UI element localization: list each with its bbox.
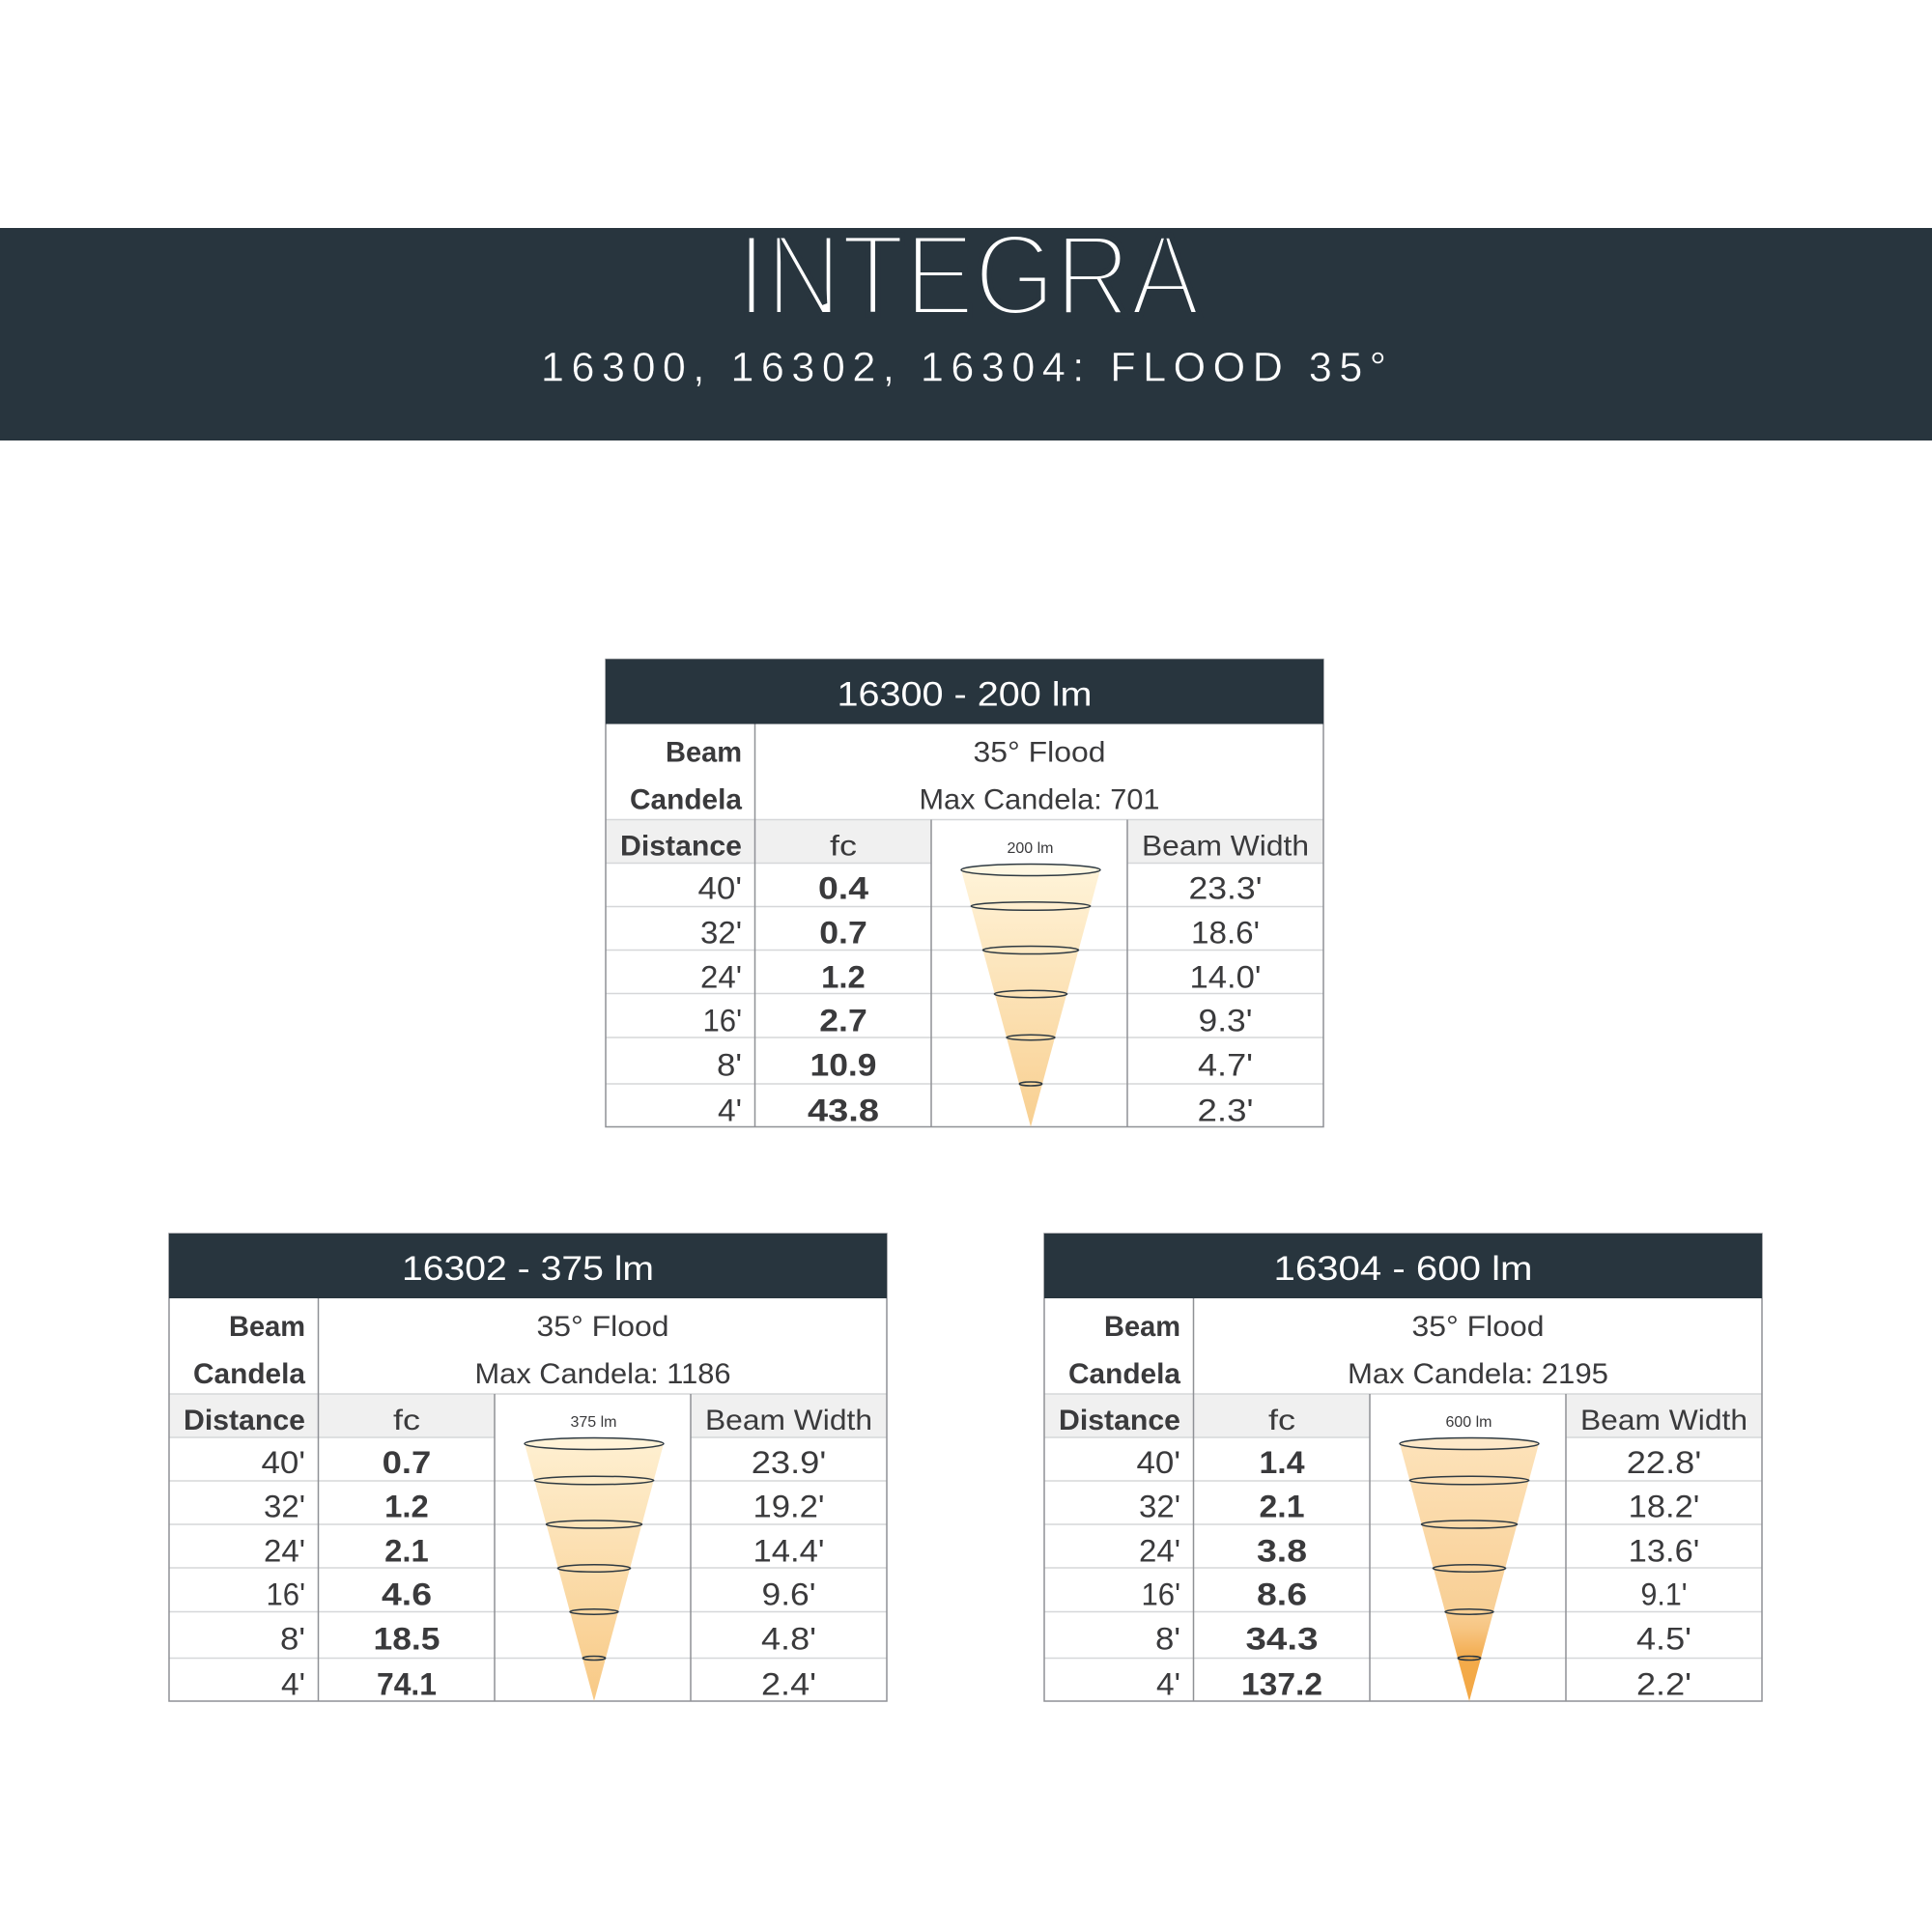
fc column: 18.5 [373,1621,440,1656]
beam row [666,736,1105,769]
fc column [1241,1445,1322,1702]
beam width column [1627,1445,1701,1702]
title: INTEGRA: INTEGRA [737,211,1200,340]
fc column: 1.2 [384,1490,429,1524]
icon: light cone 375 lm [525,1414,664,1701]
column headings: Distance [620,831,742,862]
header text: 16300 - 200 lm [837,676,1092,713]
beam row: Beam [1104,1311,1180,1343]
column headings [184,1405,872,1436]
distance column [697,871,742,1128]
beam width column: 14.4' [753,1534,825,1569]
distance column: 8' [1155,1621,1180,1656]
subtitle: 16300, 16302, 16304: FLOOD 35° [541,344,1386,390]
fc column: 0.7 [819,916,867,951]
distance column: 24' [700,960,742,995]
beam width column: 13.6' [1629,1534,1699,1569]
beam width column: 23.3' [1188,871,1262,906]
distance column [1136,1445,1180,1702]
table: 16302 - 375 lm [169,1234,887,1702]
column headings: Beam Width [1580,1405,1747,1436]
fc column [373,1445,440,1702]
column headings [620,831,1309,862]
fc column: 2.7 [819,1003,867,1037]
column headings: Distance [1059,1405,1180,1436]
beam width column: 9.3' [1198,1003,1252,1037]
header text: 16302 - 375 lm [402,1250,654,1288]
column headings [1059,1405,1747,1436]
distance column [261,1445,305,1702]
beam width column: 9.1' [1640,1577,1687,1611]
beam row: 35° Flood [974,736,1105,769]
fc column: 137.2 [1241,1667,1322,1702]
table shading and grid [1044,1234,1762,1701]
header bar [606,659,1323,724]
table: 16300 - 200 lm [606,659,1323,1128]
table: 16304 - 600 lm [1044,1234,1762,1702]
beam width column: 4.7' [1198,1047,1253,1082]
distance column: 32' [700,916,742,951]
candela row: Max Candela: 1186 [475,1358,730,1390]
distance column: 40' [697,871,742,906]
fc column: 74.1 [377,1667,437,1702]
beam width column [1188,871,1262,1128]
beam row: Beam [666,736,742,769]
distance column: 16' [703,1003,742,1037]
header text: 16304 - 600 lm [1273,1250,1532,1288]
candela row: Max Candela: 701 [920,784,1159,815]
fc column: 2.1 [384,1534,429,1569]
beam width column: 9.6' [761,1577,815,1611]
distance column: 16' [1142,1577,1180,1611]
beam row [229,1311,668,1343]
fc column: 43.8 [808,1094,879,1128]
fc column: 4.6 [382,1577,432,1611]
fc column: 8.6 [1257,1577,1307,1611]
fc column: 3.8 [1257,1534,1307,1569]
candela row [193,1358,730,1390]
beam width column: 2.2' [1636,1667,1691,1702]
candela row: Candela [193,1358,305,1390]
fc column: 1.2 [821,960,866,995]
beam row: 35° Flood [537,1311,668,1343]
candela row: Candela [1068,1358,1180,1390]
candela row [630,784,1159,815]
beam width column: 2.3' [1198,1094,1254,1128]
distance column: 40' [1136,1445,1180,1480]
icon: light cone 375 lm: 375 lm [570,1414,617,1431]
table shading and grid [169,1234,887,1701]
distance column: 8' [280,1621,305,1656]
distance column: 32' [264,1490,305,1524]
beam width column: 23.9' [752,1445,826,1480]
icon: light cone 200 lm [961,840,1100,1126]
beam width column: 22.8' [1627,1445,1701,1480]
distance column: 24' [264,1534,305,1569]
header bar [169,1234,887,1298]
icon: light cone 600 lm [1400,1414,1539,1701]
beam width column: 4.8' [761,1621,816,1656]
fc column: 2.1 [1260,1490,1304,1524]
beam width column: 2.4' [761,1667,816,1702]
beam width column: 18.2' [1629,1490,1699,1524]
beam width column: 14.0' [1190,960,1262,995]
beam width column: 19.2' [753,1490,825,1524]
column headings: fc [1268,1405,1295,1436]
distance column: 4' [718,1094,742,1128]
column headings: Beam Width [705,1405,872,1436]
column headings: Distance [184,1405,305,1436]
column headings: fc [830,831,857,862]
beam width column: 4.5' [1636,1621,1691,1656]
distance column: 32' [1139,1490,1180,1524]
beam row [1104,1311,1544,1343]
fc column: 0.4 [818,871,868,906]
distance column: 24' [1139,1534,1180,1569]
fc column: 34.3 [1246,1621,1318,1656]
candela row [1068,1358,1608,1390]
beam width column [752,1445,826,1702]
beam row: Beam [229,1311,305,1343]
header bar [1044,1234,1762,1298]
fc column [808,871,879,1128]
fc column: 0.7 [383,1445,431,1480]
beam row: 35° Flood [1412,1311,1544,1343]
table shading and grid [606,659,1323,1126]
column headings: fc [393,1405,420,1436]
distance column: 4' [281,1667,305,1702]
candela row: Candela [630,784,742,815]
fc column: 1.4 [1260,1445,1305,1480]
fc column: 10.9 [810,1047,877,1082]
distance column: 4' [1156,1667,1180,1702]
icon: light cone 200 lm: 200 lm [1007,840,1054,857]
column headings: Beam Width [1142,831,1309,862]
distance column: 8' [717,1047,742,1082]
beam width column: 18.6' [1191,916,1260,951]
candela row: Max Candela: 2195 [1348,1358,1608,1390]
distance column: 16' [267,1577,305,1611]
icon: light cone 600 lm: 600 lm [1445,1414,1492,1431]
distance column: 40' [261,1445,305,1480]
title banner [0,211,1932,440]
